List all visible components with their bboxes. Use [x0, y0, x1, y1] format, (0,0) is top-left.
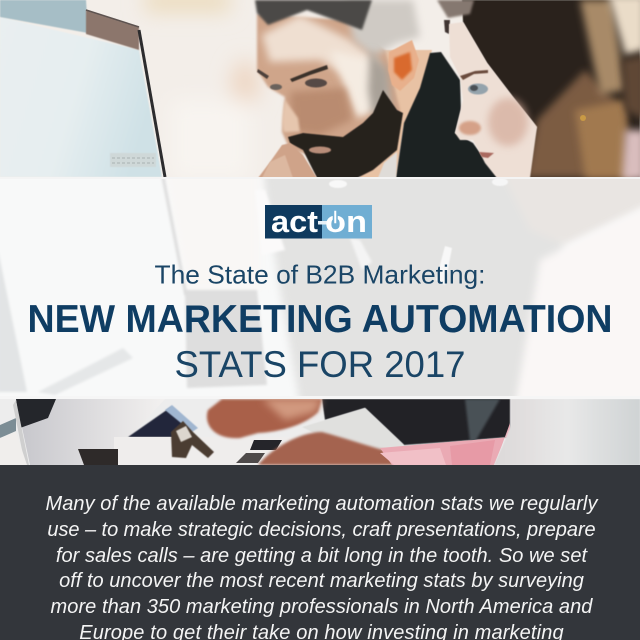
neck — [360, 50, 432, 178]
upper hand — [207, 399, 322, 438]
lower scene: desk and hands — [0, 395, 640, 465]
eyes and brows — [290, 65, 328, 82]
face — [257, 14, 400, 170]
face — [449, 22, 537, 178]
man — [255, 0, 498, 178]
logo: act-on: on — [325, 204, 367, 239]
monitor — [0, 0, 165, 177]
translucent title band — [0, 177, 640, 399]
desk triangle — [302, 408, 404, 452]
right light area — [494, 399, 640, 465]
title band content — [28, 204, 612, 385]
metallic object — [171, 421, 214, 458]
nose — [459, 121, 481, 135]
woman — [437, 0, 640, 180]
ear — [388, 40, 419, 91]
blonde lower hair — [525, 70, 632, 178]
hair side fade — [345, 0, 420, 57]
lower hand — [258, 432, 394, 465]
jacket — [396, 52, 498, 178]
main title: NEW MARKETING AUTOMATION — [28, 298, 612, 341]
beard — [288, 90, 403, 178]
blue sleeve — [128, 407, 192, 437]
intro paragraph — [45, 493, 598, 640]
glare — [264, 192, 285, 252]
dark suit — [322, 399, 510, 445]
photo background — [0, 0, 640, 465]
shadow shapes — [185, 290, 267, 388]
shaded cheek — [290, 88, 352, 135]
intro paragraph: use – to make strategic decisions, craft presentations, prepare — [47, 519, 596, 541]
intro paragraph: for sales calls – are getting a bit long in the tooth. So we set — [56, 545, 587, 567]
subtitle: The State of B2B Marketing: — [154, 260, 486, 290]
title second line: STATS FOR 2017 — [174, 344, 466, 385]
logo: act-on: act — [271, 204, 318, 239]
lower lip — [309, 146, 331, 154]
desk — [114, 437, 300, 465]
on-screen chart — [110, 153, 156, 167]
phones — [250, 440, 282, 450]
hero photo: two colleagues looking at a monitor — [0, 0, 640, 465]
top hair — [437, 0, 474, 18]
left monitor base — [16, 399, 165, 465]
intro paragraph: Many of the available marketing automation stats we regularly — [45, 493, 598, 515]
cheek blush — [488, 98, 528, 146]
lips — [479, 152, 494, 158]
logo: act-on — [265, 204, 372, 239]
centre tint — [262, 170, 565, 405]
brow and eye — [460, 70, 488, 80]
intro paragraph: more than 350 marketing professionals in North America and — [51, 596, 592, 618]
lit temple and cheek — [262, 15, 385, 115]
nose — [282, 100, 300, 132]
pink shirt sleeve — [380, 423, 510, 465]
dark hair — [462, 0, 640, 178]
intro text panel — [0, 465, 640, 640]
hand on chin — [258, 143, 317, 178]
intro paragraph: off to uncover the most recent marketing stats by surveying — [59, 570, 584, 592]
dark hair — [255, 0, 372, 30]
collar — [378, 152, 397, 178]
